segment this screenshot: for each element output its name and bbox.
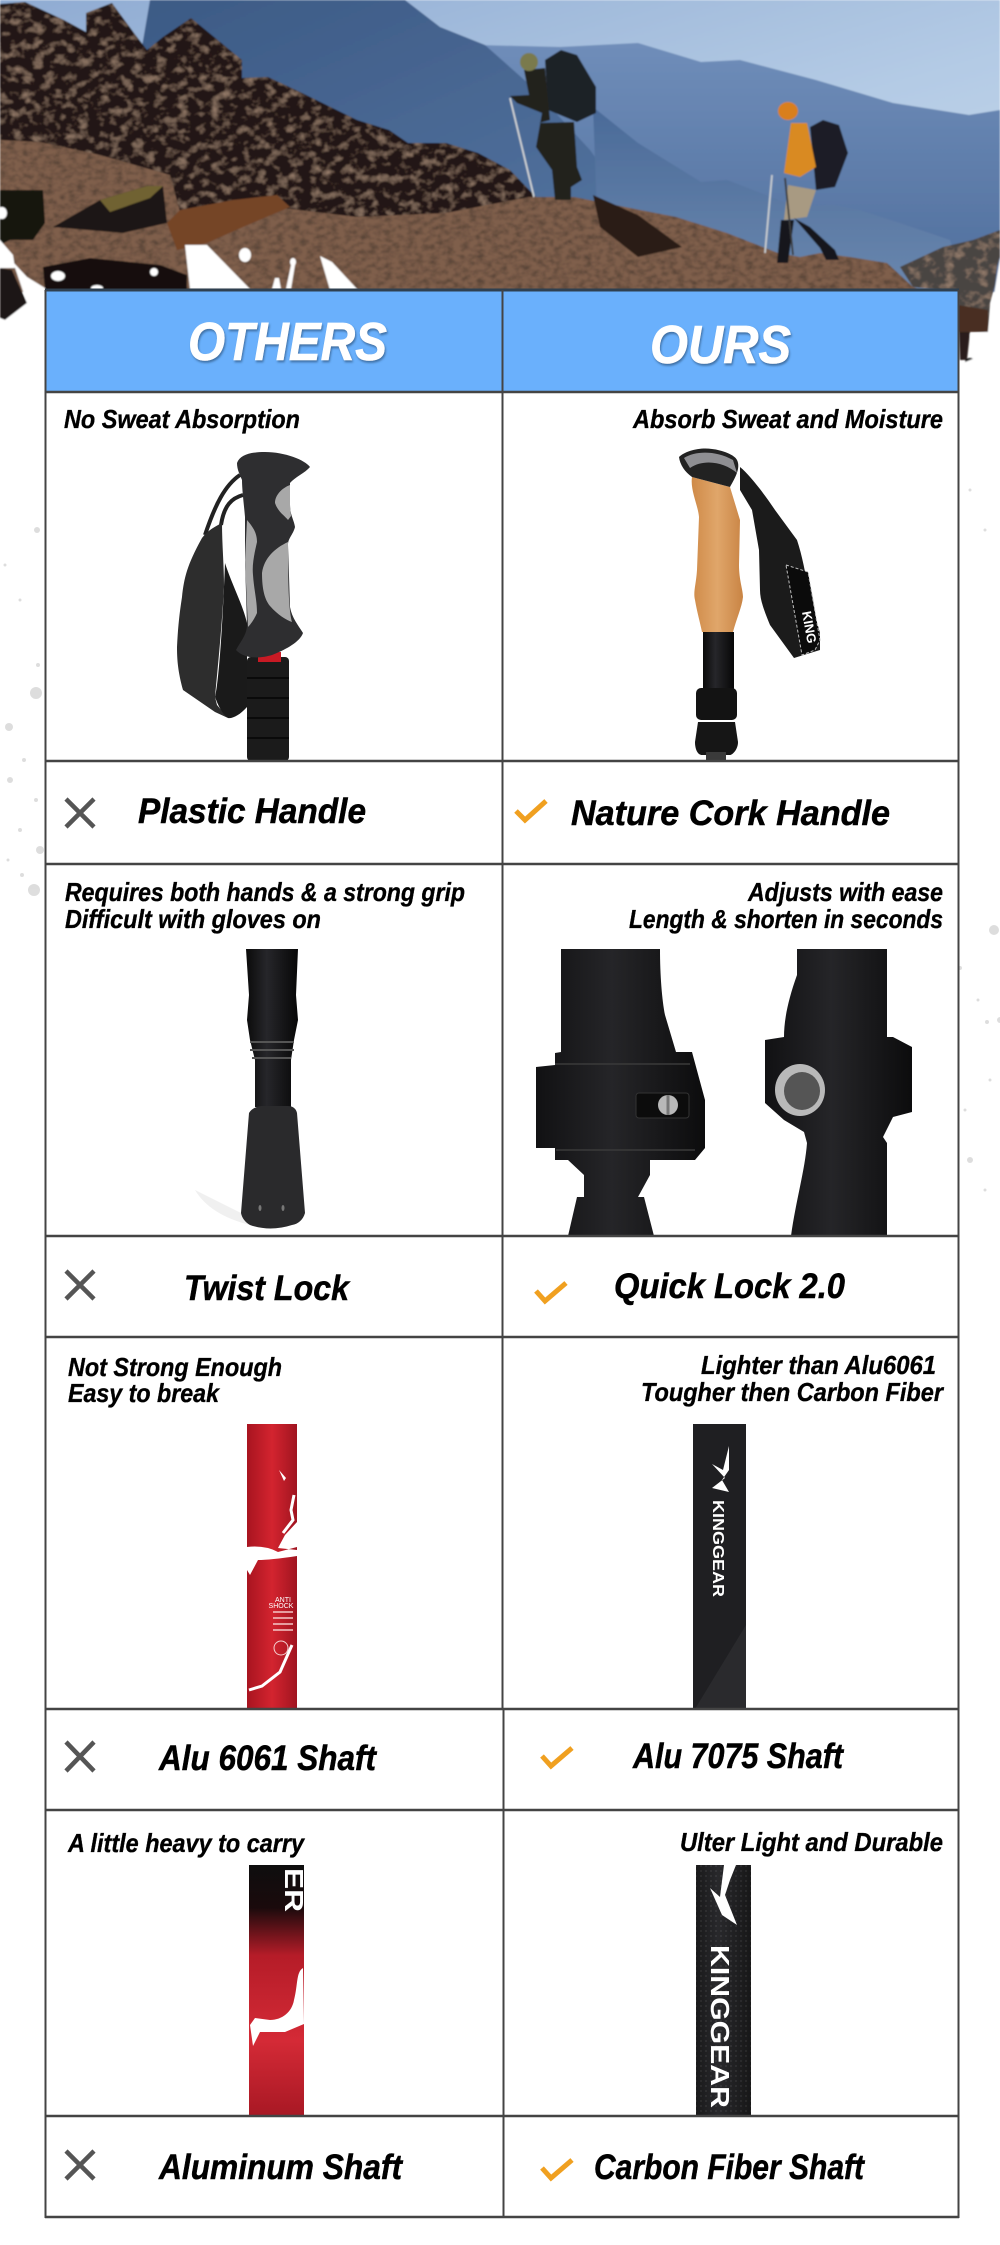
row 2 others verdict: Twist Lock <box>184 1269 350 1308</box>
caption: No Sweat Absorption <box>64 404 300 434</box>
plastic handle image <box>177 452 310 761</box>
margin ink speckles <box>4 488 1000 1192</box>
icon: cross <box>66 2151 94 2179</box>
row 1 others verdict: Plastic Handle <box>138 792 366 831</box>
row 3 others: alu 6061 <box>68 1352 297 1709</box>
icon: check <box>542 1748 572 1766</box>
row 3 others verdict <box>66 1739 377 1778</box>
caption: Not Strong Enough <box>68 1352 282 1382</box>
shadow rock by hikers <box>593 195 682 257</box>
row 3 others verdict: Alu 6061 Shaft <box>158 1739 377 1778</box>
row 2 ours: quick lock <box>536 877 943 1236</box>
white paint splash <box>0 207 1000 400</box>
row 4 others verdict <box>66 2148 403 2187</box>
header cell: others <box>46 291 502 392</box>
strap lettering: KING <box>799 610 819 645</box>
caption <box>641 1350 945 1407</box>
logo mark <box>710 1865 737 1925</box>
row 2 others: twist lock <box>65 877 465 1228</box>
twist lock image <box>195 949 305 1228</box>
caption: Ulter Light and Durable <box>680 1827 943 1857</box>
caption <box>629 877 943 934</box>
left rock shard <box>0 268 27 320</box>
quick lock image: side view <box>536 949 705 1236</box>
caption: Tougher then Carbon Fiber <box>641 1377 945 1407</box>
carbon fiber shaft image <box>696 1865 751 2116</box>
shaft lettering: KINGGEAR <box>705 1945 735 2108</box>
row 3 ours verdict <box>542 1737 844 1776</box>
caption: Length & shorten in seconds <box>629 904 943 934</box>
red aluminium shaft image: SHOCK <box>269 1603 294 1610</box>
dark rocky slope <box>0 2 540 240</box>
quick lock image: knob view <box>765 949 912 1236</box>
dark foreground boulder <box>43 258 187 292</box>
icon: check <box>516 801 546 820</box>
logo mark <box>712 1446 729 1492</box>
row 4 ours: carbon fiber <box>680 1827 943 2116</box>
hero photo: hikers on a mountain ridge <box>0 0 1000 400</box>
row 3 ours: alu 7075 <box>641 1350 945 1709</box>
caption <box>65 877 465 934</box>
row 4 ours verdict: Carbon Fiber Shaft <box>594 2148 865 2187</box>
row 4 others: aluminum <box>67 1828 309 2116</box>
row 1 others: plastic handle <box>64 404 310 761</box>
row 3 ours verdict: Alu 7075 Shaft <box>632 1737 844 1776</box>
caption: Lighter than Alu6061 <box>701 1350 936 1380</box>
shaft lettering: ANTI <box>275 1597 291 1604</box>
moss rock <box>53 186 167 233</box>
icon: check <box>542 2160 572 2178</box>
hiker two <box>765 102 848 263</box>
sky <box>0 0 1000 292</box>
icon: cross <box>66 1271 94 1299</box>
row 2 ours verdict: Quick Lock 2.0 <box>614 1267 845 1306</box>
red black shaft image <box>249 1865 309 2116</box>
hiker one <box>510 50 596 200</box>
far mountain range <box>478 43 1000 292</box>
shaft lettering: ER <box>279 1868 309 1912</box>
cork handle image <box>679 448 820 762</box>
caption: Absorb Sweat and Moisture <box>632 404 943 434</box>
icon: cross <box>66 1742 94 1771</box>
caption: Adjusts with ease <box>747 877 943 907</box>
left dark rock <box>0 190 45 245</box>
icon: cross <box>66 799 94 827</box>
black shaft image <box>693 1424 746 1709</box>
row 4 others verdict: Aluminum Shaft <box>158 2148 403 2187</box>
middle mountain <box>100 0 760 292</box>
red aluminium shaft image <box>247 1424 297 1709</box>
caption: Easy to break <box>68 1378 220 1408</box>
header cell: ours <box>503 291 958 392</box>
heading: ours: OURS <box>650 315 791 375</box>
grassy hillside <box>0 140 925 292</box>
shaft lettering: KINGGEAR <box>709 1500 726 1597</box>
reddish rock <box>167 195 290 250</box>
caption: Difficult with gloves on <box>65 904 321 934</box>
icon: check <box>536 1283 566 1301</box>
heading: others: OTHERS <box>188 312 387 372</box>
right side rock <box>900 230 1000 332</box>
caption <box>68 1352 282 1408</box>
caption: A little heavy to carry <box>67 1828 305 1858</box>
comparison table <box>45 290 959 2218</box>
row 1 ours: cork handle <box>632 404 943 762</box>
row 2 others verdict <box>66 1269 350 1308</box>
row 1 ours verdict: Nature Cork Handle <box>571 794 890 833</box>
near ridge <box>593 107 970 292</box>
caption: Requires both hands & a strong grip <box>65 877 465 907</box>
